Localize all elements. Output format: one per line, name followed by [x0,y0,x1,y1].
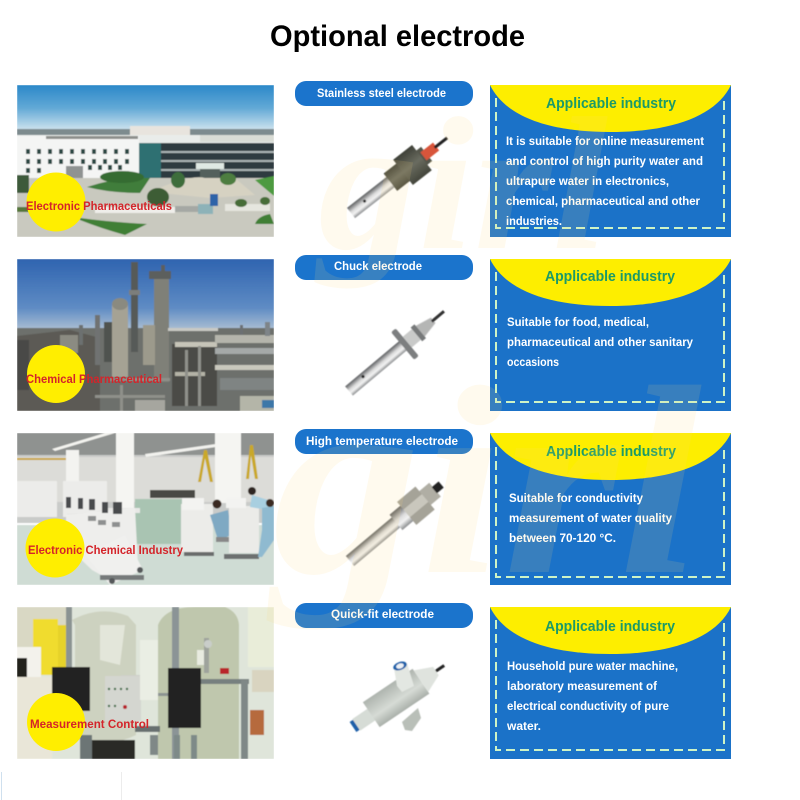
panel description [506,134,704,228]
panel description: Household pure water machine, [507,659,678,673]
panel description: electrical conductivity of pure [507,699,669,713]
yellow circle badge [27,345,85,403]
panel description: pharmaceutical and other sanitary [507,335,693,349]
panel heading: Applicable industry [546,95,677,112]
row 1: electrode name pill [295,81,473,106]
yellow heading arc [490,85,731,132]
dashed frame [496,447,724,577]
panel description: measurement of water quality [509,511,672,525]
dashed frame [496,620,724,750]
row 1: electrode name pill: Stainless steel electrode [317,86,446,100]
watermark: lower: girl [263,332,703,631]
row 3: electrode name pill: High temperature electrode [306,434,458,448]
row 2: electrode name pill: Chuck electrode [334,259,422,273]
panel description: ultrapure water in electronics, [506,174,669,188]
row 4: applicable industry panel [490,607,731,759]
icon: stainless steel electrode [341,125,457,226]
icon: chuck electrode [337,298,456,405]
row 4: electrode name pill: Quick-fit electrode [331,607,434,621]
row 2: chemical pharmaceutical photo [17,259,274,411]
row 3: applicable industry panel [490,433,731,585]
title: Optional electrode [270,20,525,53]
row 3: electronic chemical industry photo [17,433,274,585]
photo caption: Measurement Control [30,719,149,731]
panel heading: Applicable industry [545,268,676,285]
row 4: electrode name pill [295,603,473,628]
yellow circle badge [26,518,84,578]
photo caption: Electronic Pharmaceuticals [26,201,172,213]
panel description: It is suitable for online measurement [506,134,704,148]
dashed frame [496,98,724,228]
icon: high temperature electrode [340,473,451,572]
yellow heading arc [490,433,731,480]
panel description: Suitable for food, medical, [507,315,649,329]
row 3: electrode name pill [295,429,473,454]
photo caption: Electronic Chemical Industry [28,545,184,557]
panel description: industries. [506,214,562,228]
panel description: water. [506,719,541,733]
bottom edge marks [1,772,122,800]
panel description: chemical, pharmaceutical and other [506,194,700,208]
row 2: electrode name pill [295,255,473,280]
panel description: laboratory measurement of [507,679,658,693]
icon: quick-fit electrode [345,653,453,739]
panel description [509,491,672,545]
yellow circle badge [26,172,86,232]
row 4: measurement control photo [17,607,274,759]
panel description: Suitable for conductivity [509,491,643,505]
row 1: applicable industry panel [490,85,731,237]
dashed frame [496,272,724,402]
panel description: occasions [507,355,559,369]
yellow heading arc [490,607,731,654]
panel description [507,315,693,369]
photo caption: Chemical Pharmaceutical [26,374,162,386]
yellow circle badge [27,693,85,751]
row 2: applicable industry panel [490,259,731,411]
watermark: upper: girl [314,80,608,290]
panel description: and control of high purity water and [506,154,703,168]
row 1: electronic pharmaceuticals photo [17,85,274,237]
panel heading: Applicable industry [546,443,677,460]
panel heading: Applicable industry [545,618,676,635]
panel description [506,659,678,733]
yellow heading arc [490,259,731,306]
panel description: between 70-120 °C. [509,531,616,545]
